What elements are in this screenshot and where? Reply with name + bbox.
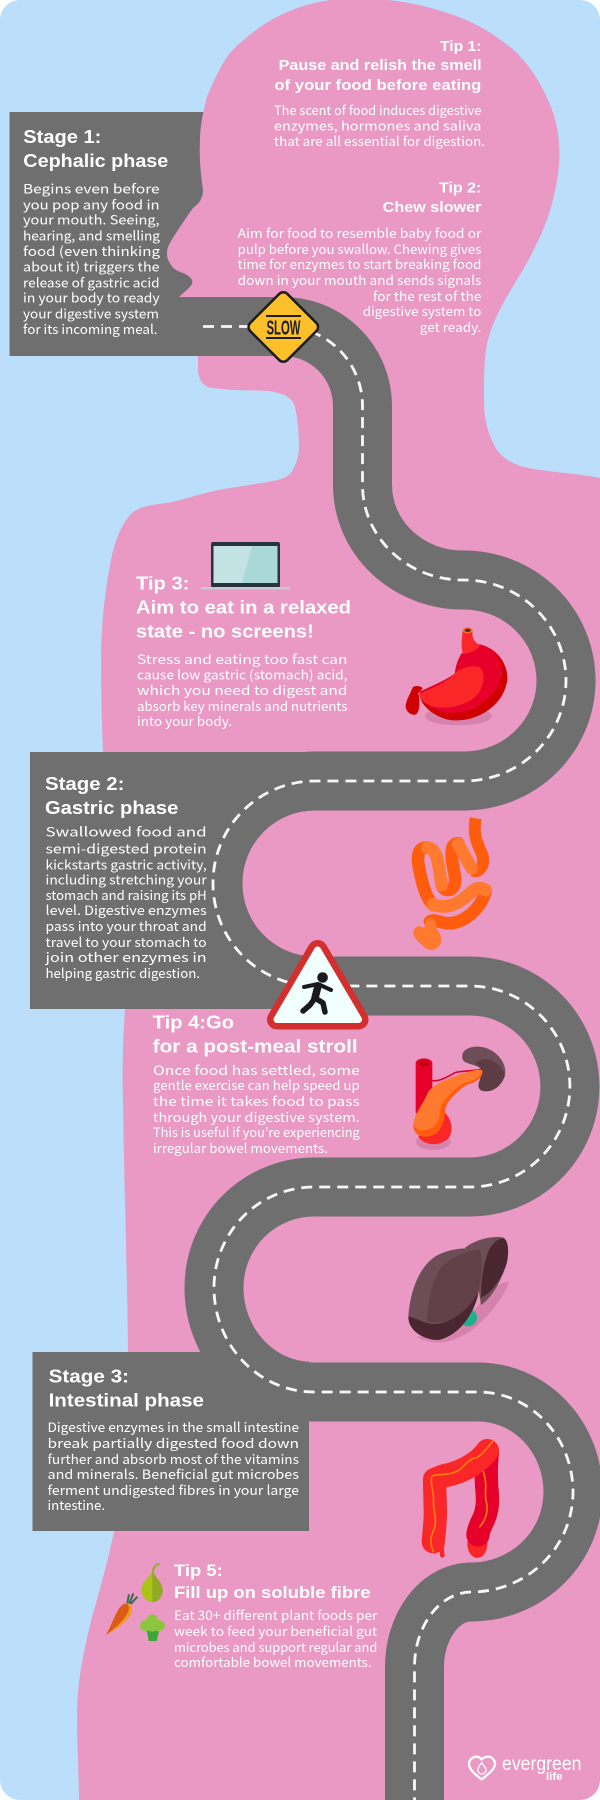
tip 2 heading bbox=[383, 182, 482, 212]
stage 1 body: for its incoming meal. bbox=[23, 319, 158, 338]
tip 2 body: for the rest of the bbox=[373, 286, 481, 305]
tip 4 body: Once food has settled, some bbox=[153, 1060, 360, 1079]
tip 5 heading bbox=[174, 1562, 370, 1602]
icon: laptop bbox=[201, 542, 290, 590]
icon: carrot bbox=[106, 1593, 137, 1635]
tip 4 heading: for a post-meal stroll bbox=[153, 1036, 358, 1056]
tip 2 body: pulp before you swallow. Chewing gives bbox=[238, 239, 481, 258]
stage 3 body bbox=[48, 1417, 299, 1514]
stage 2 body: level. Digestive enzymes bbox=[46, 900, 207, 919]
panel: stage 2 background bbox=[30, 752, 315, 1009]
road inner bend 2 bbox=[242, 810, 315, 956]
stage 3 body: intestine. bbox=[48, 1495, 105, 1514]
stage 1 body: in your body to ready bbox=[23, 288, 160, 306]
icon: pear bbox=[142, 1564, 163, 1602]
tip 1 body bbox=[274, 104, 484, 149]
stage 1 text bbox=[23, 127, 168, 338]
stage 2 heading: Gastric phase bbox=[45, 798, 178, 818]
tip 1 body: enzymes, hormones and saliva bbox=[274, 116, 481, 135]
stage 3 body: further and absorb most of the vitamins bbox=[48, 1449, 299, 1468]
tip 2 body: get ready. bbox=[420, 317, 481, 336]
tip 2 bbox=[238, 180, 482, 336]
stage 3 body: break partially digested food down bbox=[48, 1433, 299, 1452]
tip 4 body: the time it takes food to pass bbox=[153, 1091, 360, 1110]
tip 3 body: which you need to digest and bbox=[137, 680, 348, 699]
tip 1 body: that are all essential for digestion. bbox=[274, 131, 485, 150]
stage 1 body: your digestive system bbox=[23, 303, 159, 322]
icon: slow road sign: SLOW bbox=[266, 318, 301, 340]
icon: pancreas bbox=[413, 1047, 505, 1150]
tip 3 heading: Tip 3: bbox=[136, 572, 189, 593]
stage 1 body bbox=[23, 178, 161, 338]
tip 5 heading: Tip 5: bbox=[174, 1562, 223, 1580]
tip 4 body: gentle exercise can help speed up bbox=[153, 1075, 360, 1094]
stage 2 body: including stretching your bbox=[46, 869, 208, 888]
tip 2 heading: Chew slower bbox=[383, 199, 482, 216]
tip 3 body: absorb key minerals and nutrients bbox=[137, 696, 348, 715]
tip 5 body: comfortable bowel movements. bbox=[174, 1652, 372, 1671]
stage 1 body: Begins even before bbox=[23, 178, 160, 197]
tip 1 heading: Tip 1: bbox=[440, 38, 482, 55]
stage 2 body: stomach and raising its pH bbox=[46, 885, 207, 904]
panel: stage 3 text bbox=[48, 1366, 299, 1514]
tip 1 body: The scent of food induces digestive bbox=[274, 100, 481, 119]
panel: stage 3 background bbox=[32, 1352, 309, 1531]
tip 1 heading bbox=[274, 38, 482, 94]
icon: pedestrian warning sign bbox=[277, 950, 358, 1020]
tip 4 heading bbox=[153, 1012, 358, 1056]
road inner bend 3 bbox=[278, 1352, 309, 1362]
tip 3 heading: Aim to eat in a relaxed bbox=[136, 596, 351, 617]
tip 1 heading: Pause and relish the smell bbox=[279, 57, 482, 74]
icon: vegetables bbox=[106, 1564, 165, 1641]
stage 2 body: Swallowed food and bbox=[46, 822, 207, 841]
stage 1 body: your mouth. Seeing, bbox=[23, 210, 160, 228]
tip 1 bbox=[274, 38, 485, 150]
icon: stomach bbox=[406, 627, 507, 725]
logo: evergreen life: life bbox=[546, 1771, 562, 1783]
icon: liver bbox=[408, 1237, 509, 1342]
tip 2 body bbox=[238, 223, 482, 336]
stage 3 body: ferment undigested fibres in your large bbox=[48, 1480, 299, 1499]
tip 1 heading: of your food before eating bbox=[274, 77, 481, 94]
stage 1 body: about it) triggers the bbox=[23, 256, 160, 275]
icon: slow road sign bbox=[254, 298, 312, 356]
tip 3 bbox=[136, 572, 351, 730]
tip 4 body: through your digestive system. bbox=[153, 1107, 360, 1126]
tip 2 body: digestive system to bbox=[363, 301, 482, 320]
stage 1 heading: Stage 1: bbox=[23, 127, 101, 147]
tip 3 heading bbox=[136, 576, 350, 638]
stage 3 body: Digestive enzymes in the small intestine bbox=[48, 1417, 299, 1436]
stage 2 body: join other enzymes in bbox=[44, 947, 207, 966]
icon: broccoli bbox=[140, 1614, 165, 1641]
tip 5 body: Eat 30+ different plant foods per bbox=[174, 1605, 378, 1624]
stage 2 body: semi-digested protein bbox=[46, 838, 207, 857]
stage 1 heading bbox=[23, 127, 168, 171]
tip 4 bbox=[153, 1012, 360, 1157]
stage 3 heading: Intestinal phase bbox=[49, 1390, 204, 1410]
tip 5 body: week to feed your beneficial gut bbox=[174, 1621, 377, 1640]
icon: small intestine bbox=[413, 818, 486, 950]
stage 3 heading bbox=[49, 1366, 204, 1410]
tip 2 heading: Tip 2: bbox=[439, 180, 481, 197]
logo: evergreen life: evergreen bbox=[502, 1754, 582, 1775]
icon: large intestine bbox=[431, 1441, 493, 1558]
tip 2 body: time for enzymes to start breaking food bbox=[238, 254, 481, 273]
stage 1 body: food (even thinking bbox=[23, 241, 161, 260]
stage 2 body: travel to your stomach to bbox=[46, 932, 207, 951]
stage 1 heading: Cephalic phase bbox=[23, 151, 168, 171]
winding road bbox=[175, 326, 573, 1800]
tip 3 body: cause low gastric (stomach) acid, bbox=[137, 664, 348, 683]
tip 3 heading: state - no screens! bbox=[136, 620, 314, 641]
stage 2 heading bbox=[45, 774, 178, 818]
stage 1 body: you pop any food in bbox=[23, 194, 160, 213]
panel: stage 1 background bbox=[10, 112, 204, 356]
stage 1 body: release of gastric acid bbox=[23, 272, 160, 291]
panel: stage 2 text bbox=[44, 774, 208, 982]
tip 2 body: down in your mouth and sends signals bbox=[238, 270, 481, 289]
tip 5 body: microbes and support regular and bbox=[174, 1637, 377, 1656]
tip 5 heading: Fill up on soluble fibre bbox=[174, 1584, 370, 1602]
tip 4 body bbox=[153, 1060, 360, 1157]
stage 2 heading: Stage 2: bbox=[45, 774, 124, 794]
tip 4 body: This is useful if you’re experiencing bbox=[153, 1122, 360, 1141]
stage 2 body: kickstarts gastric activity, bbox=[46, 854, 207, 873]
tip 5 body bbox=[174, 1605, 378, 1671]
logo: evergreen life bbox=[469, 1754, 582, 1783]
stage 3 heading: Stage 3: bbox=[49, 1366, 129, 1386]
tip 4 heading: Tip 4:Go bbox=[153, 1012, 234, 1032]
tip 5 bbox=[174, 1562, 378, 1671]
tip 3 body: into your body. bbox=[137, 711, 232, 730]
tip 4 body: irregular bowel movements. bbox=[153, 1138, 328, 1157]
stage 2 body bbox=[44, 822, 208, 982]
tip 3 body bbox=[137, 649, 348, 730]
stage 1 body: hearing, and smelling bbox=[23, 226, 161, 245]
stage 3 body: and minerals. Beneficial gut microbes bbox=[48, 1464, 299, 1483]
tip 2 body: Aim for food to resemble baby food or bbox=[238, 223, 482, 242]
stage 2 body: helping gastric digestion. bbox=[46, 963, 200, 982]
tip 3 body: Stress and eating too fast can bbox=[137, 649, 348, 668]
stage 2 body: pass into your throat and bbox=[46, 916, 207, 935]
